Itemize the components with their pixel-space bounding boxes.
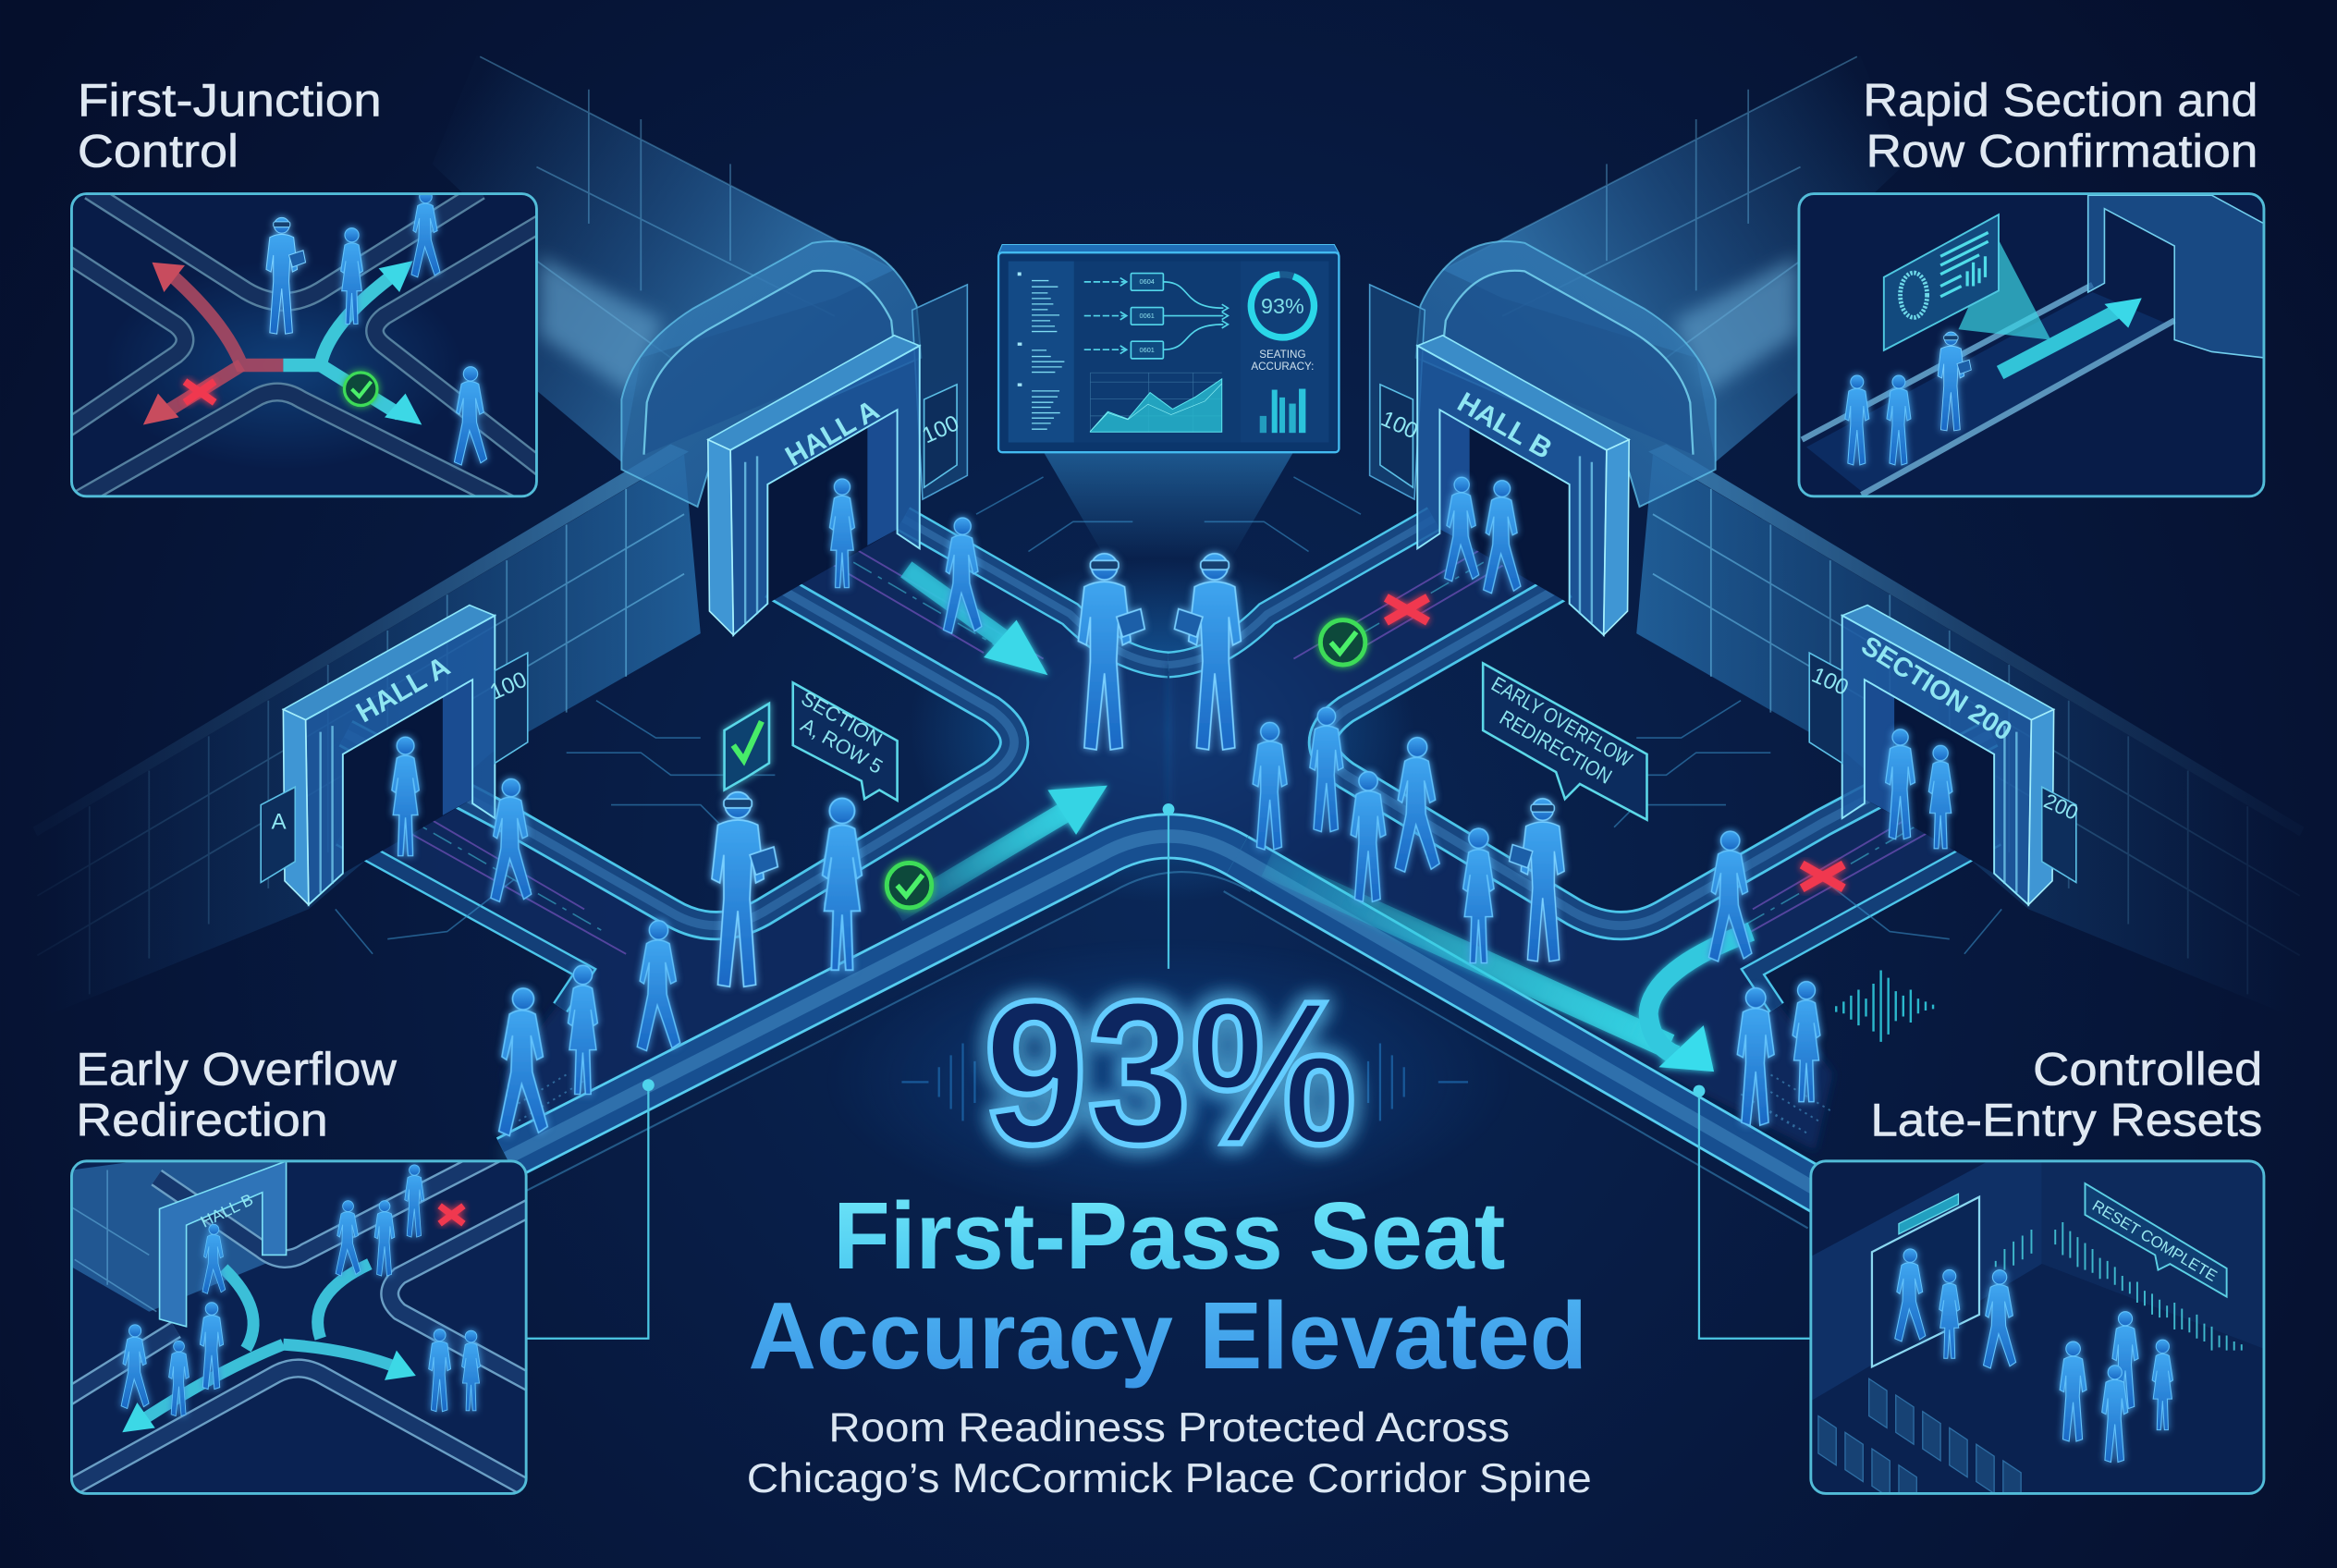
portal and sign labels: 200 <box>2040 790 2082 825</box>
floor <box>336 521 1168 1151</box>
lower signs <box>261 653 528 882</box>
flow boxes <box>1084 274 1228 359</box>
portal and sign labels: HALL A <box>351 651 455 729</box>
confirmation and rejection markers <box>887 597 1843 908</box>
approved cyan route <box>283 277 399 414</box>
room walls <box>1811 1161 2042 1401</box>
heading: Early Overflow Redirection: Early Overflow <box>76 1044 398 1096</box>
redirect routes <box>137 1264 399 1424</box>
portal and sign labels: 100 <box>919 410 962 448</box>
heading: Controlled Late-Entry Resets <box>1870 1044 2262 1145</box>
direction arrow <box>2001 310 2120 373</box>
panel: controlled late-entry resets <box>1811 1161 2264 1514</box>
corridor rails <box>1802 285 2174 495</box>
accuracy ring: 93% <box>1261 294 1304 318</box>
corridor floor <box>1806 292 2170 495</box>
subheading line 1: Room Readiness Protected Across <box>828 1405 1510 1451</box>
left half of corridor structure <box>33 55 1168 1151</box>
distant portal <box>2088 195 2264 358</box>
panel: first-junction control <box>66 190 545 507</box>
red arrowheads <box>143 263 185 424</box>
portal and sign labels: SECTION 200 <box>1856 631 2017 747</box>
tunnel <box>433 55 921 507</box>
overflow callout bubble: EARLY OVERFLOW <box>1487 672 1636 772</box>
section callout bubble: A, ROW 5 <box>797 713 887 778</box>
seating rows <box>1818 1378 2021 1514</box>
doorway <box>1872 1197 1979 1366</box>
accuracy label: ACCURACY: <box>1251 361 1314 373</box>
people <box>1895 1249 2172 1463</box>
arrowhead: left junction <box>1047 786 1107 835</box>
circuit traces <box>336 477 1132 954</box>
check: right <box>1320 620 1365 665</box>
floor streaks cyan <box>363 521 1013 932</box>
monitor frame <box>998 245 1339 452</box>
arrowhead: upper left corridor <box>984 620 1047 675</box>
arrow: upper left corridor <box>906 570 1001 638</box>
floor speckle <box>507 1074 596 1133</box>
cross: right corridor lower <box>1802 864 1843 888</box>
central floor glow <box>909 559 1416 901</box>
check: left <box>887 863 932 908</box>
beam <box>1958 240 2050 340</box>
heading: Rapid Section and Row Confirmation: Rapid Section and <box>1863 75 2257 127</box>
door sign <box>1899 1194 1958 1234</box>
heading: Rapid Section and Row Confirmation <box>1863 75 2257 178</box>
list headers <box>1018 273 1022 386</box>
floor streaks <box>355 504 1044 954</box>
arrow: curved late-entry <box>1648 932 1751 1055</box>
section callout bubble: SECTION <box>798 687 887 752</box>
people in main scene <box>392 477 1952 1135</box>
mini portal label: HALL B <box>198 1190 256 1231</box>
flow box labels: 0601 <box>1140 346 1155 354</box>
portal and sign labels: HALL A <box>780 394 885 472</box>
people <box>1845 332 1971 465</box>
upper portal <box>708 336 920 635</box>
heading: Early Overflow Redirection: Redirection <box>76 1094 328 1145</box>
overflow callout bubble <box>1483 663 1647 820</box>
heading: Early Overflow Redirection <box>76 1044 398 1145</box>
flow box labels <box>1140 277 1155 354</box>
dashboard monitor <box>998 245 1339 452</box>
shield check bubble <box>725 704 769 790</box>
reset bubble: RESET COMPLETE <box>2089 1196 2221 1285</box>
portal and sign labels <box>271 386 2082 834</box>
cross: right corridor upper <box>1386 597 1428 621</box>
arrowhead <box>2104 298 2142 328</box>
flow box labels: 0604 <box>1140 277 1155 286</box>
mini tunnel and portal <box>71 1161 287 1312</box>
monitor light beam <box>1044 451 1293 559</box>
headline line 1: First-Pass Seat <box>833 1182 1505 1289</box>
panel: early overflow redirection <box>66 1133 536 1493</box>
overflow callout bubble: REDIRECTION <box>1496 706 1616 789</box>
heading: First-Junction Control <box>78 75 382 178</box>
cross mark <box>440 1206 463 1224</box>
portal and sign labels: HALL B <box>1452 386 1558 465</box>
side panel and sign 100 <box>912 285 967 499</box>
arrowhead: right junction <box>1658 1025 1714 1072</box>
accuracy label: SEATING <box>1259 349 1306 361</box>
corridor rails <box>340 519 1168 1008</box>
lower portal <box>283 606 495 905</box>
headline <box>748 1182 1587 1389</box>
heading: Controlled Late-Entry Resets: Late-Entry Resets <box>1870 1094 2262 1145</box>
heading: First-Junction Control: First-Junction <box>78 75 382 127</box>
heading: Controlled Late-Entry Resets: Controlled <box>2033 1044 2262 1096</box>
junction rails <box>66 190 545 507</box>
arrow: left junction <box>898 811 1067 913</box>
stat glow <box>826 939 1511 1222</box>
people <box>266 190 487 465</box>
cyan arrowheads <box>379 261 422 424</box>
side list <box>1032 281 1064 429</box>
callout dots <box>642 803 1705 1097</box>
arrowheads <box>122 1351 416 1432</box>
flow box labels: 0061 <box>1140 312 1155 320</box>
stat waveforms <box>901 1044 1468 1121</box>
subheading line 2: Chicago’s McCormick Place Corridor Spine <box>747 1456 1592 1501</box>
bar chart <box>1260 389 1305 433</box>
subheading <box>747 1405 1592 1501</box>
accuracy label <box>1251 349 1314 373</box>
arrow: right junction <box>1266 864 1670 1047</box>
callout lines <box>526 809 1811 1339</box>
junction rails <box>66 1133 536 1493</box>
section callout bubble <box>793 682 898 801</box>
hologram panel <box>1884 214 1999 350</box>
mirrored right half of corridor structure <box>1168 55 2304 1151</box>
heading: First-Junction Control: Control <box>78 126 239 178</box>
portal and sign labels: A <box>271 809 287 834</box>
audio wave <box>1996 1222 2242 1351</box>
waveform right of corridor <box>1836 971 1933 1042</box>
portal and sign labels: 100 <box>1377 406 1422 445</box>
mini portal <box>160 1161 287 1327</box>
wall <box>33 444 701 1020</box>
accuracy ring <box>1242 265 1323 346</box>
portal and sign labels: 100 <box>1808 663 1852 701</box>
rejected red route <box>167 271 283 411</box>
heading: Rapid Section and Row Confirmation: Row Confirmation <box>1866 126 2257 178</box>
portal and sign labels: 100 <box>486 668 531 705</box>
route arrows <box>898 570 1751 1072</box>
room floor <box>1811 1264 2264 1493</box>
people <box>121 1165 480 1416</box>
check mark <box>344 373 377 406</box>
panel: rapid section and row confirmation <box>1799 194 2264 496</box>
cross mark <box>185 382 214 402</box>
headline line 2: Accuracy Elevated <box>748 1282 1587 1389</box>
outer junction rails <box>507 836 1821 1228</box>
area chart <box>1090 373 1222 432</box>
big stat 93%: 93% <box>984 959 1356 1187</box>
